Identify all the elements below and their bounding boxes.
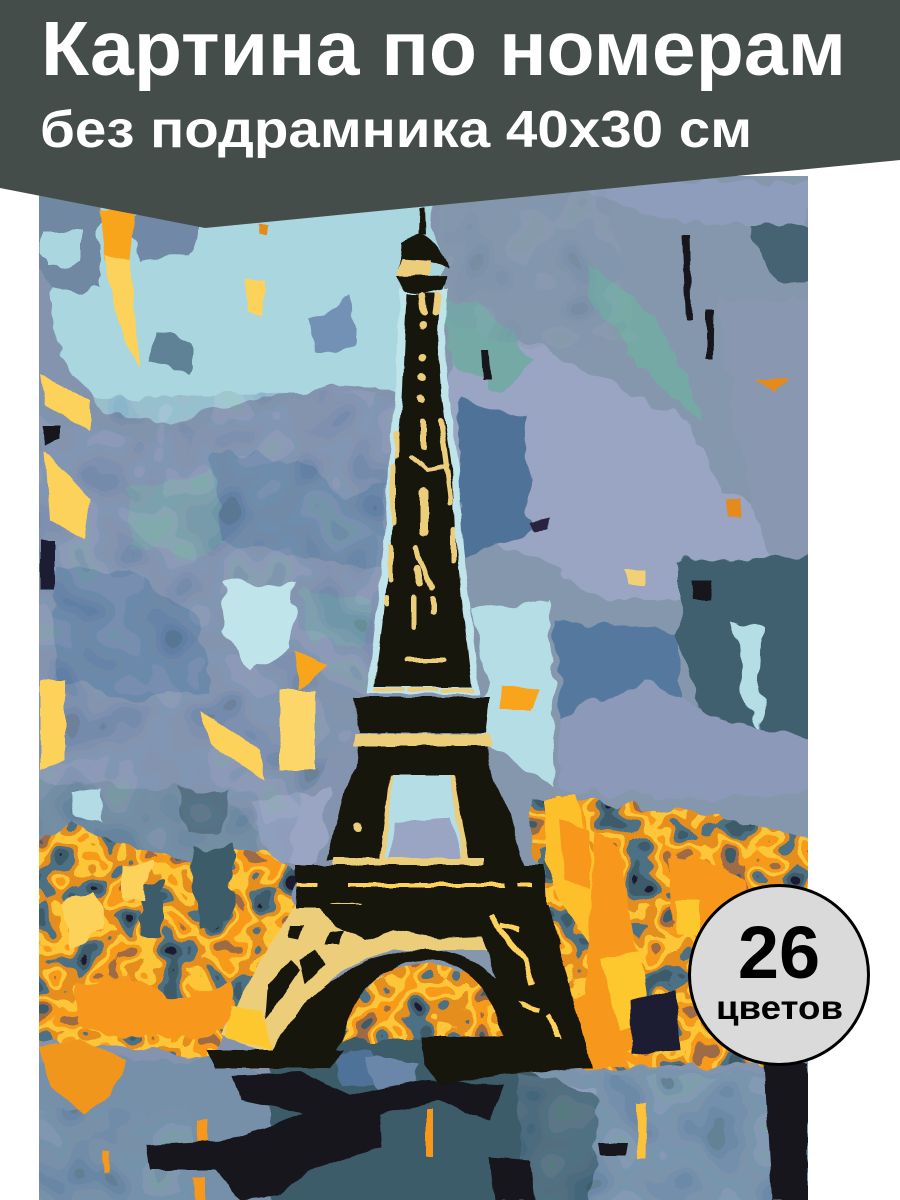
painting: mottled cool brushwork [39, 176, 808, 1200]
badge: 26 colours [690, 886, 868, 1064]
painting: orange and yellow accents [39, 210, 790, 1200]
painting: left orange glow and teal shadows [60, 845, 240, 1040]
tower: left lattice flecks [265, 925, 345, 1020]
subtitle: без подрамника 40х30 см [40, 101, 752, 159]
tower: spire [419, 208, 426, 234]
badge label: цветов [716, 989, 843, 1026]
title: Картина по номерам [41, 6, 846, 92]
tower: left leg [326, 770, 390, 860]
tower: pale halo around shaft [375, 296, 472, 687]
tower: base tan frame [222, 900, 550, 1055]
tower: top platform [396, 275, 448, 294]
tower: lattice under platform [320, 904, 561, 945]
header banner [0, 0, 900, 228]
tower: dome [397, 234, 450, 271]
painting: pale sky openings [70, 580, 295, 820]
painting: dark brush marks [42, 235, 808, 1200]
tower: left foot [206, 1050, 345, 1068]
tower: left foot yellow [226, 1005, 272, 1050]
tower: second platform [295, 865, 546, 908]
tower: tan band below platform [353, 734, 492, 746]
tower: first platform [354, 697, 490, 733]
painting: Eiffel Tower paint-by-numbers [20, 160, 830, 1200]
tower: middle lintel [355, 746, 490, 775]
painting background: sky colour patches [20, 160, 830, 1200]
tower: arch opening [384, 775, 462, 860]
tower: upper shaft [375, 294, 472, 687]
painting: mottled warm city lights [39, 796, 808, 1071]
tower: main arch black band [272, 948, 523, 1050]
tower: right leg [453, 770, 524, 866]
tower: centre black mass [421, 1037, 578, 1085]
tower: shaft golden details [376, 296, 472, 690]
tower: tan beam [333, 858, 483, 866]
Eiffel Tower [206, 208, 592, 1085]
badge number: 26 [738, 911, 820, 994]
tower: right side black truss [480, 922, 592, 1068]
